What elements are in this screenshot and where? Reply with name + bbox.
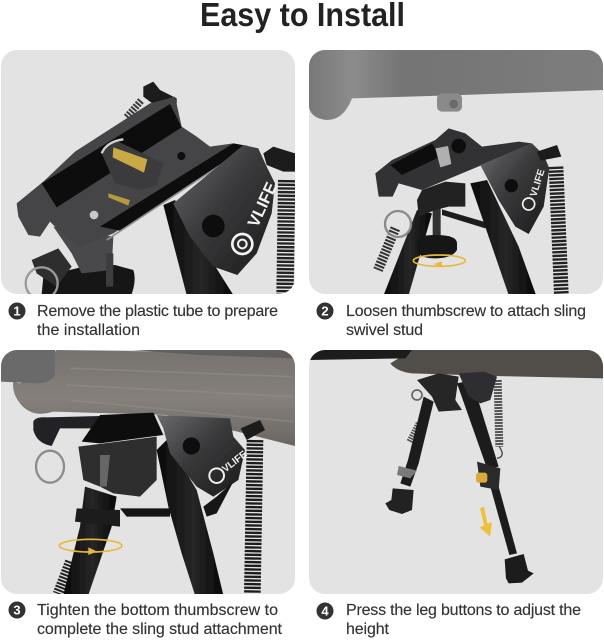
- caption: step 2: swivel stud: [346, 322, 423, 339]
- caption: step 3: 3: [13, 602, 21, 618]
- rear spring: [127, 100, 142, 117]
- left legs: [63, 487, 117, 595]
- right leg: [157, 440, 223, 595]
- caption: step 4: height: [346, 621, 390, 638]
- left leg: [384, 210, 432, 295]
- wood stock: [390, 350, 604, 378]
- thumbscrew rod: [432, 208, 441, 236]
- panel: step 2 loosen thumbscrew: [309, 50, 604, 295]
- clamp ring edge: [102, 139, 123, 153]
- side screw: [505, 179, 518, 192]
- clamp silver: [435, 146, 451, 167]
- crossbar: [120, 508, 170, 517]
- logo text: VLIFE: [244, 179, 281, 230]
- logo ring: [209, 468, 224, 483]
- side plate: [480, 143, 549, 234]
- caption: step 1: Remove the plastic tube to prepare: [37, 303, 278, 320]
- light gaps: [100, 455, 110, 487]
- stock top edge: [133, 350, 295, 358]
- spring: [285, 180, 287, 294]
- threaded rod: [106, 253, 113, 287]
- rear knob: [143, 82, 177, 108]
- left spring: [378, 228, 395, 270]
- wood stock: [13, 350, 295, 446]
- lower bracket: [203, 482, 233, 517]
- caption: step 2: Loosen thumbscrew to attach sling: [346, 303, 586, 320]
- wood grain: [67, 368, 293, 422]
- top plate: [375, 128, 532, 197]
- lower stem and thumbscrew: [42, 265, 135, 294]
- side screw: [183, 437, 200, 455]
- left foot: [385, 488, 414, 514]
- right foot: [505, 554, 534, 583]
- thumbscrew collar: [75, 508, 120, 527]
- mechanism: [417, 182, 465, 217]
- yellow rotate arrow: [59, 539, 122, 555]
- right spring: [556, 167, 561, 294]
- left leg: [400, 397, 434, 487]
- yellow arrow: [480, 507, 492, 537]
- caption: step 4: 4: [321, 604, 329, 618]
- front rail: [100, 143, 248, 231]
- rifle stock silhouette: [309, 50, 604, 120]
- tension knob: [537, 145, 561, 161]
- right spring: [252, 440, 255, 594]
- thumbscrew disc: [417, 235, 457, 258]
- caption: step 2: 2: [321, 304, 329, 318]
- caption: step 3: [8, 602, 283, 638]
- logo ring: [523, 198, 535, 210]
- logo ring: [232, 234, 252, 254]
- rail highlight: [106, 164, 221, 241]
- side plate: [459, 372, 497, 403]
- mechanism: [78, 437, 157, 497]
- spring: [498, 380, 499, 447]
- left button: [397, 466, 417, 478]
- panel: step 1 remove plastic tube: [1, 50, 295, 299]
- tension knob: [263, 147, 295, 172]
- side plate: [173, 145, 275, 275]
- black rail: [309, 350, 412, 360]
- right leg: [470, 180, 536, 295]
- top clamp: [82, 413, 163, 443]
- sling ring: [36, 451, 64, 483]
- leg: [163, 200, 233, 295]
- base plate: [17, 97, 233, 247]
- yellow leg button: [476, 473, 487, 483]
- logo text: VLIFE: [220, 449, 250, 475]
- right leg upper: [457, 380, 499, 468]
- right leg lower: [490, 487, 517, 555]
- caption: step 4: Press the leg buttons to adjust the: [346, 602, 581, 619]
- logo text: VLIFE: [528, 168, 548, 198]
- plate holes: [90, 211, 98, 219]
- rubber pad: [42, 104, 182, 207]
- caption: step 1: [8, 302, 278, 339]
- brass sling stud: [113, 147, 147, 173]
- sling ring: [412, 390, 422, 400]
- left spring: [58, 562, 71, 594]
- mechanism: [417, 373, 462, 412]
- yellow rotate arrow: [413, 255, 465, 267]
- caption: step 2: [316, 302, 586, 339]
- sling ring: [26, 267, 58, 299]
- caption: step 1: the installation: [37, 322, 140, 339]
- caption: step 4: [316, 602, 581, 638]
- caption: step 3: Tighten the bottom thumbscrew to: [37, 602, 278, 619]
- clamp block: [102, 140, 163, 190]
- rubber pad: [390, 143, 440, 175]
- lever bracket: [32, 248, 72, 287]
- crossbar: [442, 209, 487, 228]
- caption: step 3: complete the sling stud attachment: [37, 621, 283, 638]
- side plate: [157, 415, 245, 497]
- panel: step 4 adjust height: [309, 350, 604, 594]
- side screw: [202, 215, 225, 237]
- sling ring: [385, 211, 411, 237]
- panel: step 3 tighten thumbscrew: [1, 350, 295, 595]
- caption: step 1: 1: [13, 304, 21, 318]
- left spring: [409, 423, 419, 442]
- sling swivel stud: [437, 93, 462, 112]
- tension knob: [241, 420, 265, 440]
- collars: [477, 462, 500, 490]
- grey rail end: [1, 350, 55, 383]
- front clip: [33, 416, 100, 446]
